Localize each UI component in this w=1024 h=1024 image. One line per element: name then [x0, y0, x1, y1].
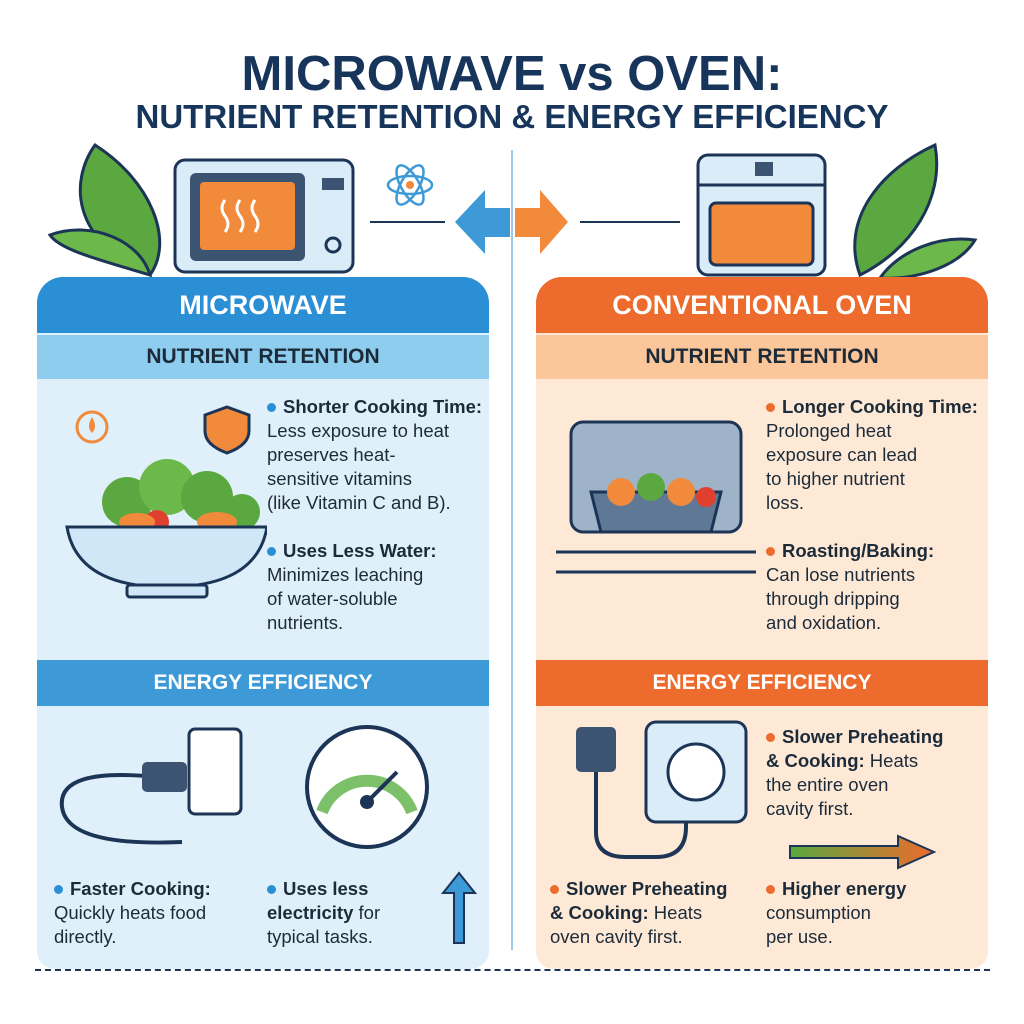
text: longer cooking time: exposure can lead [766, 444, 917, 465]
text: uses less water: Uses Less Water: [283, 540, 437, 561]
text: faster cooking: Faster Cooking: [70, 878, 211, 899]
text: higher energy consumption: Higher energy [782, 878, 906, 899]
panel: microwave [37, 277, 489, 969]
top illustrations [48, 142, 978, 277]
icon: oven [698, 155, 825, 275]
text: uses less electricity [267, 878, 380, 947]
icon: roasting pan [556, 420, 756, 574]
arrow: gradient [789, 834, 936, 870]
panel: conventional oven [536, 277, 988, 969]
icon: right leaves [855, 145, 975, 278]
text: uses less electricity: typical tasks. [267, 926, 373, 947]
text: higher energy consumption: per use. [766, 926, 833, 947]
title: NUTRIENT RETENTION & ENERGY EFFICIENCY [136, 98, 888, 135]
text: roasting/baking: through dripping [766, 588, 900, 609]
text: longer cooking time: Longer Cooking Time: [782, 396, 978, 417]
text: shorter cooking time: Shorter Cooking Time: [283, 396, 482, 417]
text: slower preheating (bottom): oven cavity first. [550, 926, 683, 947]
arrow: double arrow [455, 190, 568, 254]
text: uses less electricity: electricity for [267, 902, 380, 923]
heading: microwave: MICROWAVE [179, 290, 347, 320]
text: slower preheating (top): the entire oven [766, 774, 888, 795]
heading: nutrient retention [536, 335, 988, 379]
text: faster cooking: directly. [54, 926, 116, 947]
text: roasting/baking: Can lose nutrients [766, 564, 915, 585]
text: roasting/baking: Roasting/Baking: [782, 540, 934, 561]
text: slower preheating (bottom): Slower Preheating [566, 878, 727, 899]
text: longer cooking time: to higher nutrient [766, 468, 905, 489]
text: slower preheating (top) [766, 726, 943, 819]
bottom dashed line [35, 969, 990, 971]
text: faster cooking: Quickly heats food [54, 902, 206, 923]
heading: energy efficiency: ENERGY EFFICIENCY [652, 671, 871, 694]
text: uses less water: of water-soluble [267, 588, 398, 609]
icon: gauge [305, 725, 429, 849]
text: faster cooking [54, 878, 211, 947]
text: shorter cooking time [267, 396, 482, 513]
text: slower preheating (bottom): & Cooking: Heats [550, 902, 702, 923]
text: slower preheating (top): cavity first. [766, 798, 853, 819]
icon: salad bowl [65, 405, 267, 598]
heading: nutrient retention [37, 335, 489, 379]
heading: conventional oven: CONVENTIONAL OVEN [612, 290, 912, 320]
icon: up arrow [441, 872, 477, 944]
text: uses less water: nutrients. [267, 612, 343, 633]
icon: atom [388, 161, 432, 209]
text: shorter cooking time: preserves heat- [267, 444, 396, 465]
heading: energy efficiency [536, 660, 988, 706]
text: slower preheating (bottom) [550, 878, 727, 947]
icon: left leaves [50, 145, 160, 275]
text: longer cooking time [766, 396, 978, 513]
heading: nutrient retention: NUTRIENT RETENTION [146, 345, 380, 368]
text: longer cooking time: Prolonged heat [766, 420, 892, 441]
title: MICROWAVE vs OVEN: [242, 47, 782, 101]
text: slower preheating (top): Slower Preheating [782, 726, 943, 747]
text: shorter cooking time: (like Vitamin C and B). [267, 492, 451, 513]
icon: plug [60, 728, 242, 844]
heading: conventional oven [536, 277, 988, 333]
text: uses less water: Minimizes leaching [267, 564, 423, 585]
title [136, 47, 888, 135]
divider line [511, 150, 513, 950]
text: uses less electricity: Uses less [283, 878, 368, 899]
text: roasting/baking: and oxidation. [766, 612, 881, 633]
heading: energy efficiency: ENERGY EFFICIENCY [154, 671, 372, 694]
text: shorter cooking time: Less exposure to heat [267, 420, 449, 441]
text: roasting/baking [766, 540, 934, 633]
heading: energy efficiency [37, 660, 489, 706]
text: higher energy consumption [766, 878, 906, 947]
text: uses less water [267, 540, 437, 633]
text: slower preheating (top): & Cooking: Heats [766, 750, 918, 771]
heading: microwave [37, 277, 489, 333]
text: higher energy consumption: consumption [766, 902, 871, 923]
icon: plug and socket [576, 720, 748, 859]
text: shorter cooking time: sensitive vitamins [267, 468, 412, 489]
text: longer cooking time: loss. [766, 492, 804, 513]
heading: nutrient retention: NUTRIENT RETENTION [645, 345, 879, 368]
icon: microwave [175, 160, 353, 272]
